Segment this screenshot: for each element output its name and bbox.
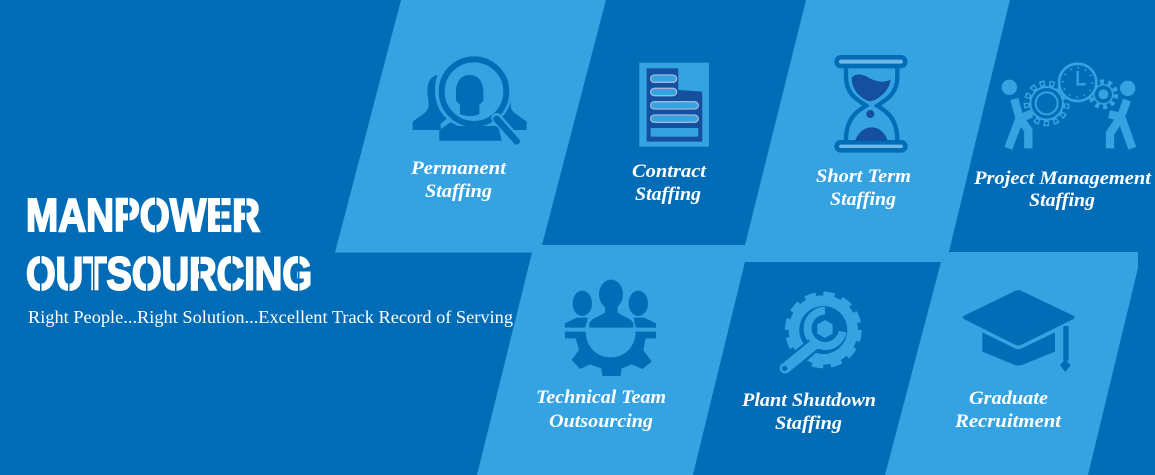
- label: permanent staffing: [410, 158, 507, 202]
- icon: people search: [413, 54, 527, 142]
- panel: short term staffing: [745, 0, 1010, 262]
- label: permanent staffing: Permanent: [410, 158, 507, 179]
- label: technical team outsourcing: Technical Team: [536, 387, 666, 408]
- label: technical team outsourcing: [536, 387, 666, 432]
- label: short term staffing: Staffing: [830, 189, 896, 210]
- title: [26, 189, 312, 300]
- label: permanent staffing: Staffing: [425, 181, 492, 202]
- icon: team on gear: [565, 280, 656, 376]
- label: project management staffing: [973, 168, 1152, 211]
- icon: graduation cap: [963, 290, 1075, 372]
- title: OUTSOURCING: [26, 248, 312, 300]
- panel: graduate recruitment: [885, 252, 1138, 475]
- panel: project management staffing: [949, 0, 1155, 252]
- label: technical team outsourcing: Outsourcing: [549, 411, 653, 432]
- icon: hourglass: [837, 57, 905, 150]
- panel: contract staffing: [542, 0, 806, 245]
- label: plant shutdown staffing: Plant Shutdown: [741, 390, 876, 411]
- panel: technical team outsourcing: [477, 245, 745, 475]
- label: contract staffing: Contract: [632, 161, 707, 182]
- label: project management staffing: Staffing: [1029, 190, 1095, 211]
- label: contract staffing: Staffing: [635, 184, 701, 205]
- label: contract staffing: [632, 161, 707, 205]
- title: MANPOWER: [26, 189, 260, 241]
- label: project management staffing: Project Management: [973, 168, 1152, 189]
- label: short term staffing: [816, 166, 911, 210]
- label: graduate recruitment: Graduate: [969, 388, 1049, 409]
- label: short term staffing: Short Term: [816, 166, 911, 187]
- label: graduate recruitment: Recruitment: [954, 411, 1062, 432]
- label: graduate recruitment: [954, 388, 1062, 432]
- tagline: Right People...Right Solution...Excellent Track Record of Serving: [28, 307, 513, 327]
- label: plant shutdown staffing: [741, 390, 876, 434]
- panel: permanent staffing: [335, 0, 606, 252]
- panel: plant shutdown staffing: [693, 262, 941, 475]
- icon: document: [639, 63, 709, 147]
- label: plant shutdown staffing: Staffing: [775, 413, 842, 434]
- icon: wrench in gear: [782, 294, 859, 371]
- icon: people with gears and clock: [1002, 64, 1135, 148]
